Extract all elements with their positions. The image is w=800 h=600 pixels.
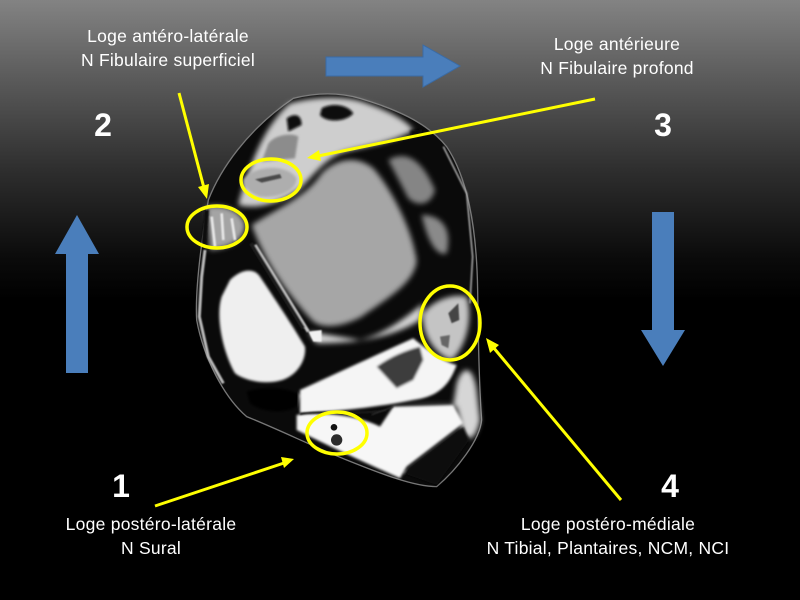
label: postero-lateral compartment: Loge postéro-latérale [66,514,236,534]
label: postero-medial compartment: N Tibial, Plantaires, NCM, NCI [487,538,729,558]
circle: anterior compartment [241,159,301,201]
arrow: blue up [55,215,99,373]
label: postero-lateral compartment [66,514,236,558]
MRI ankle cross-section [196,94,482,487]
label: anterior compartment: N Fibulaire profond [540,58,694,78]
label: postero-medial compartment [487,514,729,558]
circle: postero-lateral compartment [307,412,367,454]
number 1: 1 [112,468,130,504]
arrow: yellow to postero-lateral [155,457,294,506]
number 2: 2 [94,107,112,143]
label: postero-lateral compartment: N Sural [121,538,181,558]
circle: postero-medial compartment [420,286,480,360]
number 4: 4 [661,468,679,504]
label: antero-lateral compartment: N Fibulaire superficiel [81,50,255,70]
label: anterior compartment: Loge antérieure [554,34,680,54]
arrow: blue right [326,45,460,87]
arrow: yellow to postero-medial [486,338,621,500]
label: antero-lateral compartment [81,26,255,70]
label: antero-lateral compartment: Loge antéro-latérale [87,26,249,46]
circle: antero-lateral compartment [187,206,247,248]
arrow: yellow to antero-lateral [179,93,209,199]
arrow: yellow to anterior [307,99,595,161]
number 3: 3 [654,107,672,143]
arrow: blue down [641,212,685,366]
label: postero-medial compartment: Loge postéro-médiale [521,514,695,534]
label: anterior compartment [540,34,694,78]
